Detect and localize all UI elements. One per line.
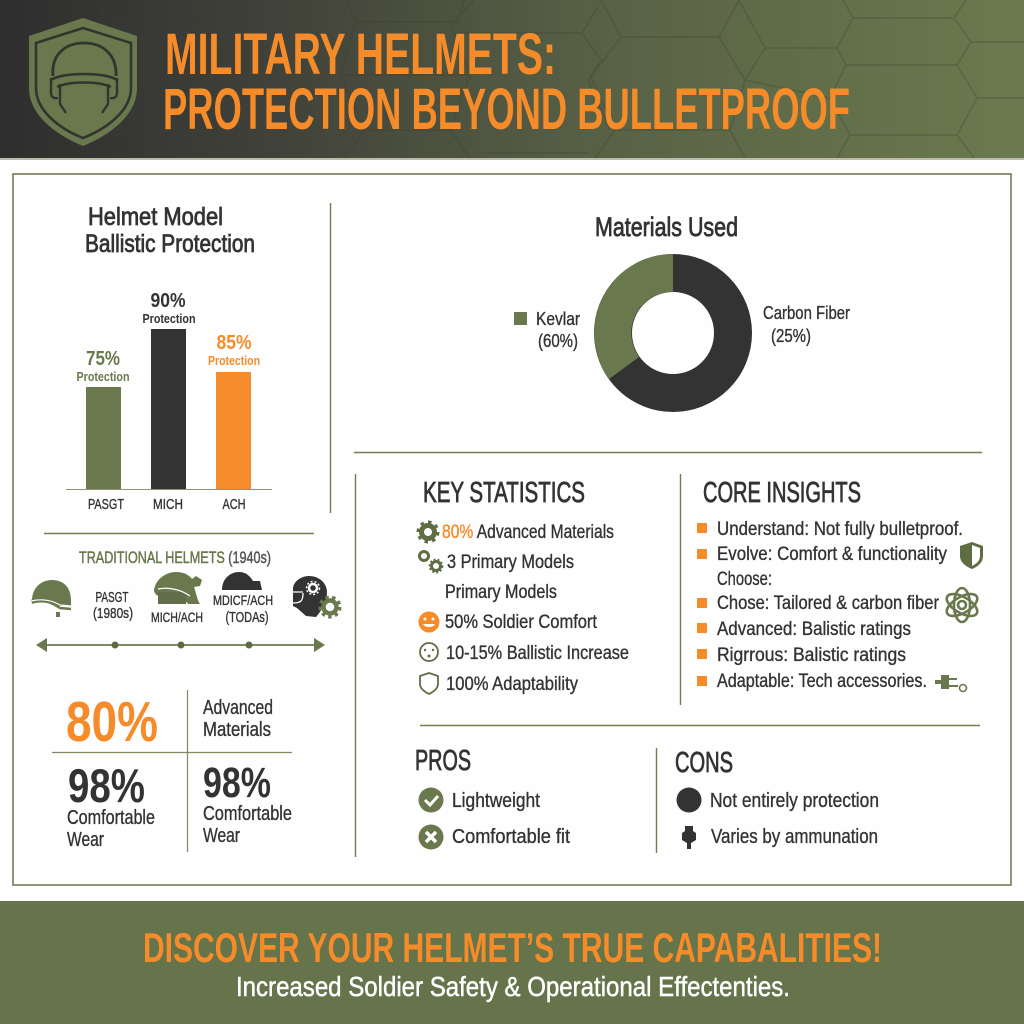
con: varies by ammunation: Varies by ammunation: [711, 826, 878, 848]
icon: MICH helmet: [154, 572, 202, 604]
legend: carbon fiber: [763, 303, 850, 346]
stat row: primary models: Primary Models: [445, 582, 557, 603]
con: not entirely protection: Not entirely protection: [710, 790, 879, 812]
timeline label: MICH/ACH (TODAs): MDICF/ACH: [213, 592, 273, 608]
panel: summary stats grid: [52, 690, 292, 852]
panel: core insights: [697, 477, 983, 692]
stat: 98% comfortable wear right: Wear: [203, 825, 240, 847]
pros heading: PROS: [415, 745, 471, 777]
chart heading: [85, 203, 255, 258]
stat: 80% advanced materials: Advanced: [203, 697, 273, 719]
panel: key statistics: [418, 477, 629, 695]
materials heading: Materials Used: [595, 212, 738, 242]
icon: modern helmet: [222, 572, 262, 590]
insight: evolve: [697, 544, 947, 590]
bar: PASGT: [76, 348, 130, 513]
donut chart: [594, 254, 733, 393]
stat: 80% advanced materials: Materials: [203, 719, 271, 741]
insight: adaptable: Adaptable: Tech accessories.: [717, 671, 927, 692]
stat row: soldier comfort: 50% Soldier Comfort: [445, 612, 598, 633]
stat: 98% comfortable wear left: Wear: [67, 829, 104, 851]
chart heading: Helmet Model: [88, 203, 223, 231]
timeline label: PASGT: [93, 589, 133, 622]
bar: ACH: 85%: [216, 332, 252, 354]
stat row: advanced materials: 80% Advanced Materials: [442, 522, 614, 543]
title: MILITARY HELMETS:: [165, 22, 556, 87]
bar: PASGT: Protection: [76, 369, 130, 384]
icon: atom: [943, 588, 981, 622]
key statistics heading: KEY STATISTICS: [423, 477, 585, 509]
header banner: [0, 0, 1024, 160]
stat row: 3 primary models: 3 Primary Models: [447, 552, 574, 573]
stat: 98% comfortable wear left: [67, 759, 155, 851]
cons heading: CONS: [675, 747, 733, 779]
pro: lightweight: [418, 788, 540, 812]
timeline label: PASGT: PASGT: [96, 589, 128, 606]
timeline label: MICH/ACH (TODAs): (TODAs): [226, 609, 269, 626]
bar: ACH: Protection: [208, 353, 260, 368]
stat: 98% comfortable wear left: 98%: [68, 759, 145, 812]
icon: future helmet with gears: [292, 576, 340, 617]
timeline label: MICH/ACH: MICH/ACH: [151, 609, 203, 625]
stat: 98% comfortable wear right: Comfortable: [203, 803, 292, 825]
pro: comfortable fit: [418, 824, 570, 850]
panel: helmet timeline: [31, 548, 340, 652]
legend: kevlar: Kevlar: [536, 309, 580, 329]
icon: half shield: [960, 542, 983, 569]
panel: materials donut chart: [514, 212, 850, 393]
bar: ACH: [208, 332, 260, 513]
con: not entirely protection: [676, 788, 879, 812]
bar: ACH: ACH: [222, 496, 246, 513]
legend: carbon fiber: (25%): [771, 326, 811, 346]
stat: 98% comfortable wear right: 98%: [203, 759, 271, 807]
panel: pros: [415, 745, 570, 850]
timeline arrow: [36, 638, 325, 652]
stat row: ballistic increase: 10-15% Ballistic Increase: [446, 643, 629, 664]
timeline heading: TRADITIONAL HELMETS (1940s): [79, 548, 271, 567]
panel: helmet model bar chart: [66, 203, 272, 513]
footer banner: [0, 901, 1024, 1024]
core insights heading: CORE INSIGHTS: [703, 477, 861, 509]
timeline label: PASGT: (1980s): [93, 605, 133, 622]
bar: MICH: Protection: [142, 311, 196, 326]
icon: plug: [935, 675, 966, 692]
insight: evolve: Choose:: [717, 569, 772, 590]
insight: rigorous: Rigrrous: Balistic ratings: [717, 645, 906, 666]
insight: evolve: Evolve: Comfort & functionality: [717, 544, 947, 565]
pro: comfortable fit: Comfortable fit: [452, 826, 570, 848]
stat row: adaptability: 100% Adaptability: [446, 674, 578, 695]
legend: kevlar: [514, 309, 580, 351]
title: [163, 22, 850, 142]
stat: 80% advanced materials: [66, 690, 273, 754]
chart heading: Ballistic Protection: [85, 230, 255, 258]
main panel frame: [13, 174, 1011, 885]
bar: MICH: MICH: [153, 496, 183, 513]
insight: understand: Understand: Not fully bulletproof.: [717, 519, 963, 540]
stat: 80% advanced materials: 80%: [66, 690, 158, 754]
stat: 98% comfortable wear left: Comfortable: [67, 807, 155, 829]
bar: MICH: [142, 290, 196, 513]
footer subline: Increased Soldier Safety & Operational Effectenties.: [236, 971, 790, 1002]
panel: cons: [675, 747, 879, 849]
icon: traditional helmet: [31, 580, 71, 617]
bar: MICH: 90%: [150, 290, 186, 312]
pro: lightweight: Lightweight: [452, 790, 540, 812]
bar: PASGT: 75%: [86, 348, 120, 370]
legend: kevlar: (60%): [538, 331, 578, 351]
legend: carbon fiber: Carbon Fiber: [763, 303, 850, 323]
timeline label: MICH/ACH (TODAs): [213, 592, 273, 626]
insight: advanced: Advanced: Balistic ratings: [717, 619, 911, 640]
insight: choose: Chose: Tailored & carbon fiber: [717, 593, 940, 614]
icon: helmet shield emblem: [29, 18, 137, 146]
stat: 98% comfortable wear right: [203, 759, 292, 847]
bar: PASGT: PASGT: [88, 496, 124, 513]
